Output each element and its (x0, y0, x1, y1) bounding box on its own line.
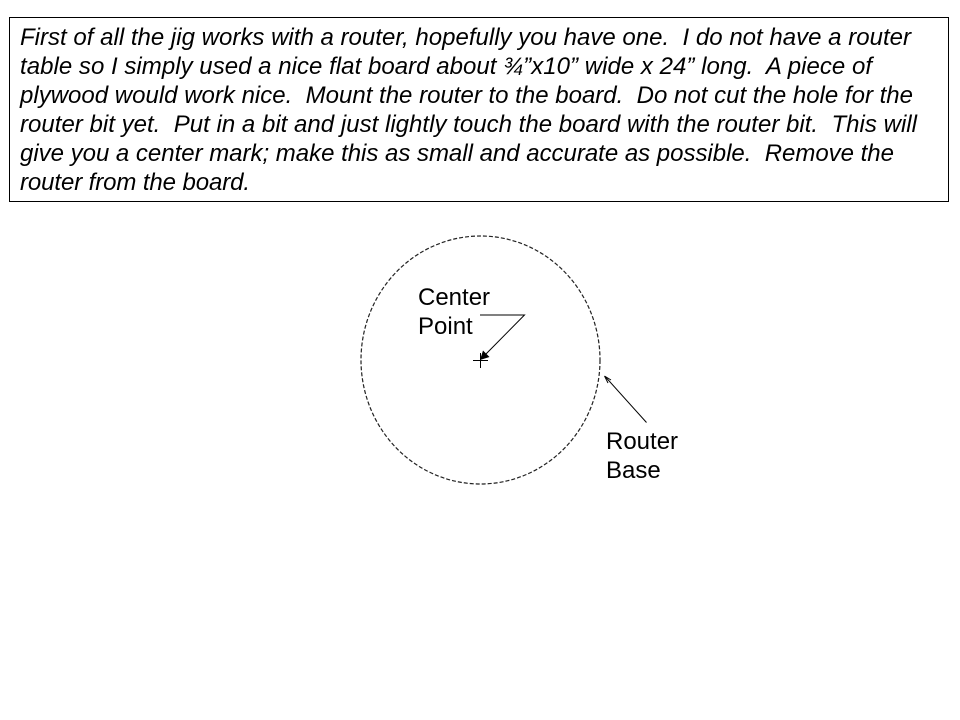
router base label (606, 428, 678, 484)
center point label (418, 284, 490, 340)
instruction text block: plywood would work nice. Mount the router to the board. Do not cut the hole for the (19, 82, 913, 109)
center point label: Center (418, 284, 490, 311)
router base arrow (604, 376, 646, 422)
instruction text block: First of all the jig works with a router, hopefully you have one. I do not have a router (20, 24, 912, 51)
instruction text block: table so I simply used a nice flat board about ¾”x10” wide x 24” long. A piece of (20, 53, 874, 80)
router base label: Base (606, 457, 661, 484)
instruction text block: router bit yet. Put in a bit and just lightly touch the board with the router bit. This will (20, 111, 918, 138)
instruction text panel (10, 18, 948, 202)
router base label: Router (606, 428, 678, 455)
router base dashed circle (361, 236, 600, 484)
instruction text block: router from the board. (20, 169, 250, 196)
center point leader arrow (480, 315, 524, 360)
center point label: Point (418, 313, 473, 340)
center cross mark (473, 353, 488, 368)
instruction text block (19, 24, 918, 196)
instruction text block: give you a center mark; make this as small and accurate as possible. Remove the (20, 140, 894, 167)
